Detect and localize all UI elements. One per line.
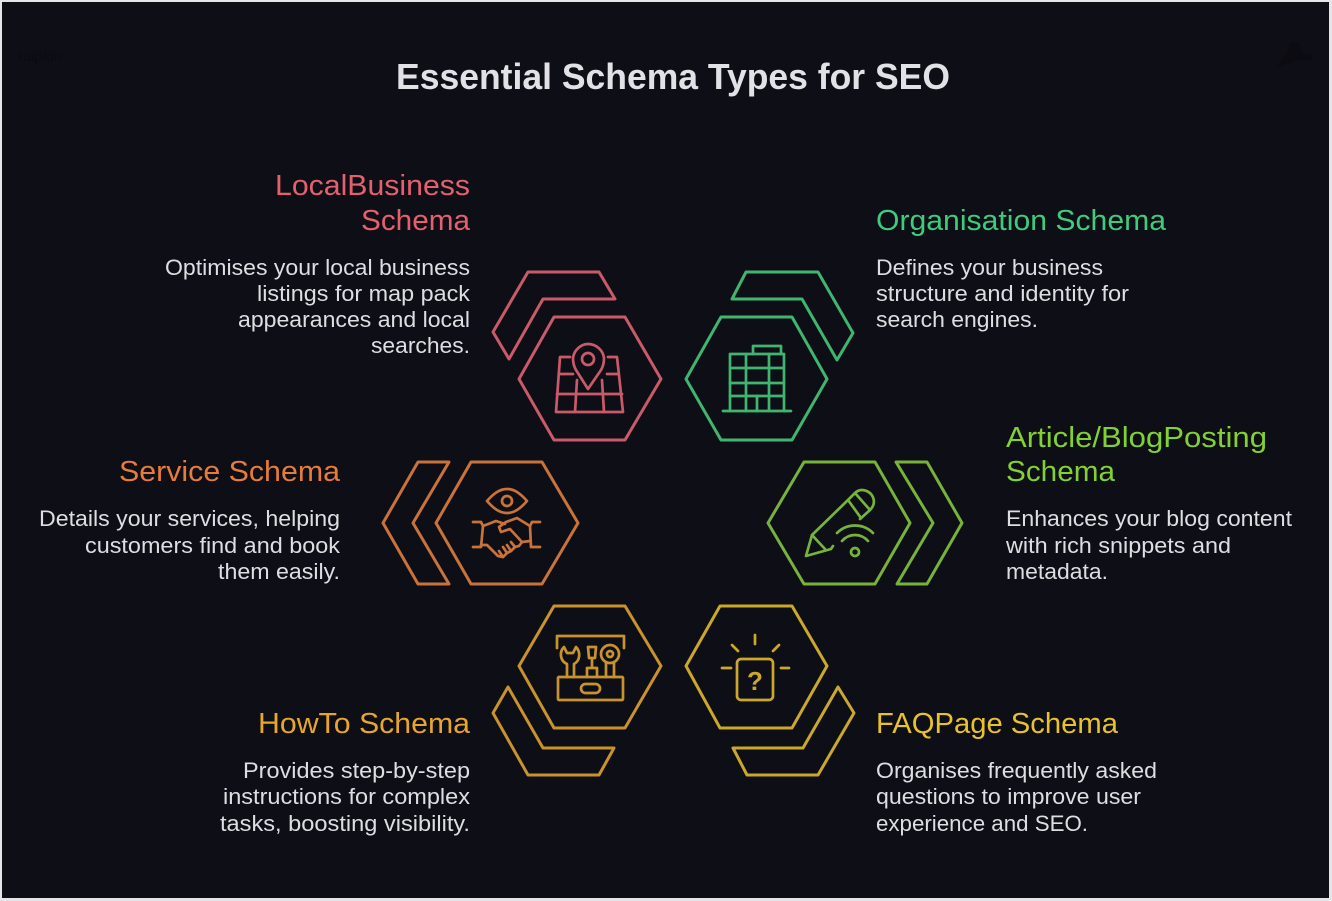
faint watermark text: napkin	[18, 48, 62, 65]
chevron: Article/BlogPosting	[896, 462, 962, 584]
description: Organisation Schema	[876, 255, 1129, 332]
description: LocalBusiness Schema: listings for map pack	[257, 281, 471, 306]
description: Service Schema: customers find and book	[85, 533, 341, 558]
title: Essential Schema Types for SEO	[396, 56, 950, 97]
description: Article/BlogPosting Schema: metadata.	[1006, 559, 1108, 584]
text: Article/BlogPosting Schema	[1005, 422, 1292, 584]
heading: Service Schema: Service Schema	[119, 456, 341, 488]
text: Organisation Schema	[876, 205, 1167, 332]
description: HowTo Schema: tasks, boosting visibility.	[220, 811, 470, 836]
icon: map with location pin	[556, 344, 623, 412]
description: HowTo Schema	[220, 758, 470, 836]
description: Organisation Schema: structure and identity for	[876, 281, 1129, 306]
heading: Organisation Schema: Organisation Schema	[876, 205, 1167, 237]
icon: toolbox	[557, 636, 624, 700]
description: Service Schema	[39, 506, 341, 584]
text: HowTo Schema	[220, 708, 471, 836]
description: Article/BlogPosting Schema: with rich snippets and	[1005, 533, 1231, 558]
icon: eye over handshake	[473, 489, 540, 557]
description: FAQPage Schema	[876, 758, 1157, 836]
faint watermark icon	[1276, 42, 1312, 68]
chevron: Service	[383, 462, 449, 584]
hexagon: HowTo	[519, 606, 661, 728]
description: Article/BlogPosting Schema	[1005, 506, 1292, 584]
panel: Organisation Schema graphic	[686, 272, 853, 440]
description: Organisation Schema: search engines.	[876, 307, 1038, 332]
panel: FAQPage Schema graphic	[686, 606, 854, 775]
description: LocalBusiness Schema	[165, 255, 471, 358]
description: Service Schema: Details your services, helping	[39, 506, 340, 531]
description: LocalBusiness Schema: searches.	[371, 333, 470, 358]
panel: Service Schema graphic	[383, 462, 578, 584]
text: Service Schema	[39, 456, 341, 584]
hexagon: Article/BlogPosting	[768, 462, 910, 584]
description: Service Schema: them easily.	[218, 559, 340, 584]
heading: Article/BlogPosting Schema	[1006, 422, 1267, 488]
text: FAQPage Schema	[876, 708, 1157, 836]
icon: pencil with wifi signal	[806, 490, 874, 556]
chevron: HowTo	[493, 687, 614, 775]
chevron: Organisation	[732, 272, 853, 360]
panel: HowTo Schema graphic	[493, 606, 661, 775]
description: Article/BlogPosting Schema: Enhances your blog content	[1006, 506, 1292, 531]
icon: office building	[723, 346, 791, 411]
description: FAQPage Schema: experience and SEO.	[876, 811, 1088, 836]
heading: LocalBusiness Schema: LocalBusiness	[275, 170, 470, 202]
description: LocalBusiness Schema: appearances and local	[238, 307, 470, 332]
heading: Article/BlogPosting Schema: Article/BlogPosting	[1006, 422, 1267, 454]
description: HowTo Schema: instructions for complex	[223, 784, 470, 809]
text: LocalBusiness Schema	[165, 170, 471, 358]
panel: Article/BlogPosting Schema graphic	[768, 462, 962, 584]
description: LocalBusiness Schema: Optimises your local business	[165, 255, 470, 280]
hexagon: Organisation	[686, 317, 827, 440]
heading: FAQPage Schema: FAQPage Schema	[876, 708, 1119, 740]
icon: question card with rays: ?	[747, 666, 763, 696]
hexagon: LocalBusiness	[519, 317, 661, 440]
heading: LocalBusiness Schema	[275, 170, 471, 237]
heading: Article/BlogPosting Schema: Schema	[1006, 456, 1116, 488]
description: Organisation Schema: Defines your business	[876, 255, 1103, 280]
icon: question card with rays	[722, 635, 789, 700]
description: FAQPage Schema: Organises frequently asked	[876, 758, 1157, 783]
description: HowTo Schema: Provides step-by-step	[243, 758, 470, 783]
heading: HowTo Schema: HowTo Schema	[258, 708, 471, 740]
hexagon: Service	[436, 462, 578, 584]
chevron: FAQPage	[733, 687, 854, 775]
chevron: LocalBusiness	[493, 272, 615, 359]
description: FAQPage Schema: questions to improve user	[876, 784, 1141, 809]
hexagon: FAQPage	[686, 606, 827, 728]
panel: LocalBusiness Schema graphic	[493, 272, 661, 440]
heading: LocalBusiness Schema: Schema	[361, 205, 471, 237]
